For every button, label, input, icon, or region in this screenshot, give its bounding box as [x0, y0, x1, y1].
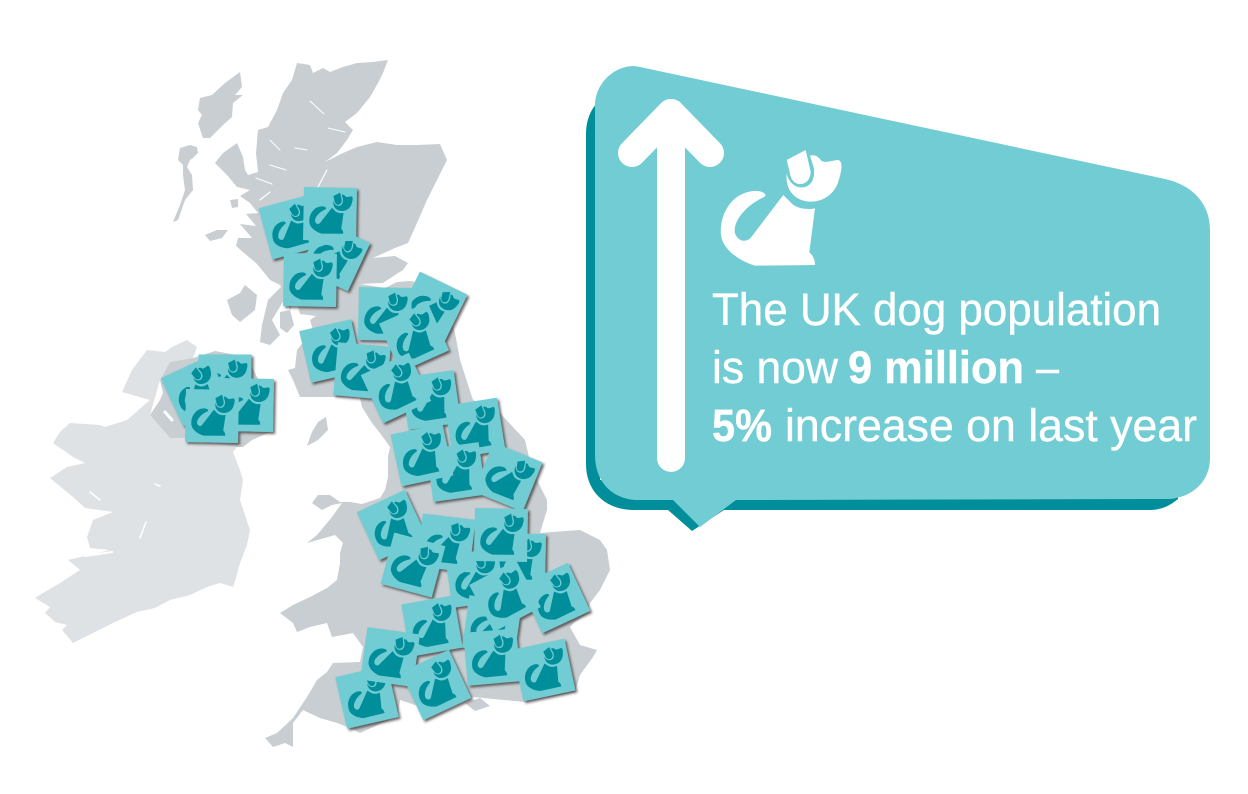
text: line two: 9 million [848, 342, 1024, 393]
map: small isle [230, 199, 238, 208]
text: line two: is now [712, 342, 838, 393]
map: mainland Great Britain [215, 60, 610, 747]
map: Kintyre [260, 285, 284, 345]
dog tiles: Northern Ireland [161, 354, 274, 443]
map: Isle of Man [307, 417, 328, 446]
text: line two [712, 342, 1059, 393]
dog tiles: northern England [299, 272, 542, 511]
dog tiles: Scotland [259, 187, 370, 307]
callout: dog population [586, 66, 1210, 531]
map: Republic of Ireland [35, 340, 250, 643]
map: Northern Ireland [150, 351, 272, 447]
text: line three: 5% [712, 400, 772, 451]
map: Isle of Wight [465, 698, 490, 711]
dog tiles: midlands and south [335, 490, 590, 729]
map: Ireland and Great Britain [35, 60, 610, 747]
map: Outer Hebrides [173, 145, 198, 222]
map: Arran [280, 310, 294, 333]
map: lochs and inlets [85, 101, 345, 556]
map: Islay and Jura [227, 285, 257, 322]
arrow: upward [632, 113, 710, 458]
map: Skye [198, 72, 243, 138]
map: Tiree and Coll [205, 230, 228, 241]
text: line three: increase on last year [785, 400, 1197, 451]
callout body [595, 66, 1210, 527]
text: line two: – [1036, 342, 1059, 393]
text: line one: The UK dog population [712, 284, 1161, 335]
callout shadow [586, 100, 1178, 531]
icon: dog [721, 150, 841, 266]
